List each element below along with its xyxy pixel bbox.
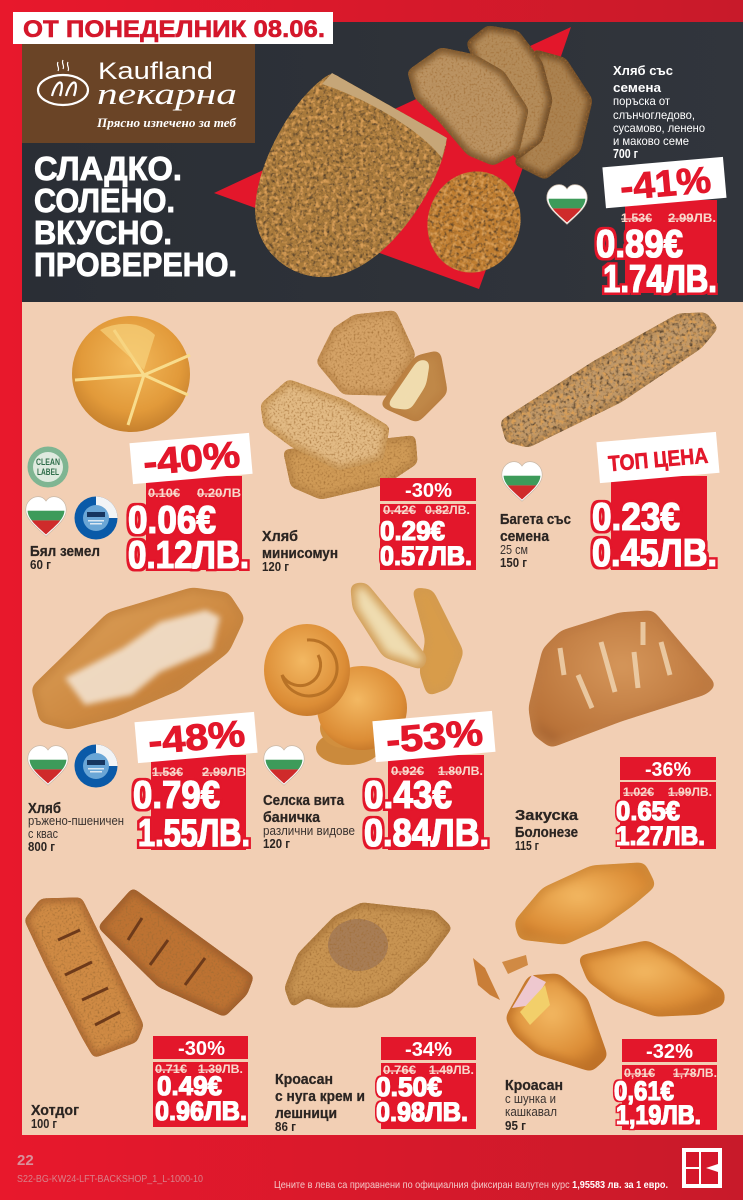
image: minisomun [263,313,445,497]
image: roll [72,316,190,432]
icon: clean label: LABEL [37,467,59,477]
price: 0.71€ [155,1064,188,1076]
hero product text: поръска от [613,94,670,108]
icon: tuv [74,744,118,788]
price: 1.39ЛВ. [198,1064,243,1076]
icon: clean label: CLEAN [36,457,60,467]
page number: 22 [17,1152,34,1169]
price: 0,61€ [614,1076,674,1106]
price: 0.57ЛВ. [380,541,472,571]
product name [500,512,571,570]
price: hero: 0.89€ [596,223,683,266]
icon: heart [26,497,66,536]
price: 0.43€ [364,774,452,817]
price: 0.42€ [383,505,417,517]
product name: Хотдог [31,1103,79,1119]
Kaufland logo [682,1148,722,1188]
print code: S22-BG-KW24-LFT-BACKSHOP_1_L-1000-10 [17,1174,203,1185]
price: -53% [384,712,485,761]
logo panel: пекарна [97,76,237,111]
product name: ръжено-пшеничен [28,814,124,828]
icon: tuv [74,496,118,540]
product name: с шунка и [505,1092,556,1106]
hero product text: 700 г [613,146,638,161]
price: 1,78ЛВ. [673,1068,717,1080]
price: 0.23€ [592,496,680,539]
currency note: Цените в лева са приравнени по официалния фиксиран валутен курс 1,95583 лв. за 1 евро. [274,1179,668,1191]
price: hero: 2.99 ЛВ. [668,213,716,225]
icon: clean label [28,446,68,488]
product: Хотдог [27,891,251,1131]
price [153,1036,248,1127]
price: 1,19ЛВ. [616,1100,701,1130]
product name: 60 г [30,558,51,572]
icon: heart [28,746,68,785]
price: 0.29€ [380,516,445,546]
product name: Хляб [28,801,61,817]
price [380,478,476,571]
image: banichka [264,585,461,765]
product name: 115 г [515,839,539,853]
price: 1.27ЛВ. [616,821,705,851]
price [614,1039,717,1130]
headline: ВКУСНО. [34,215,172,252]
red star shape [214,27,571,289]
product name: семена [500,529,550,545]
product: Багета [500,315,720,575]
image: hotdogs [27,891,251,1055]
icon: heart [264,746,304,785]
product name: Селска вита [263,793,345,809]
logo panel [22,44,255,143]
product name: баничка [263,810,321,826]
price [128,433,253,577]
price: 0.96ЛВ. [155,1096,247,1126]
price [376,1037,476,1129]
product name: Хляб [262,529,298,545]
product name: 95 г [505,1119,526,1133]
product name: Багета със [500,512,571,528]
price: 0.65€ [616,796,680,826]
price: 2.99 ЛВ [202,767,246,779]
panel: hero [13,12,743,302]
product: Кроасан с шунка [473,865,722,1133]
product name [275,1072,365,1134]
panel: products [22,302,743,1135]
price [592,432,720,575]
hero bread loaf [255,73,447,277]
image: croissants [473,865,722,1069]
price: 0.12ЛВ. [128,534,249,577]
headline: СОЛЕНО. [34,183,175,220]
price: 0.20 ЛВ [197,488,241,500]
price: 0.98ЛВ. [376,1097,468,1127]
product name: 120 г [263,837,290,851]
price: -40% [141,434,242,483]
hero product text: и маково семе [613,134,689,148]
price: 1.99ЛВ. [668,787,712,799]
price: hero: 1.53€ [621,213,653,225]
bakery icon [38,60,88,105]
price: 0.10€ [148,488,181,500]
product name: 800 г [28,840,55,854]
product name [28,801,124,854]
headline: ПРОВЕРЕНО. [34,247,237,284]
footer [17,1148,722,1191]
logo panel: Прясно изпечено за теб [96,115,237,130]
price: 0.50€ [376,1072,442,1102]
price: 0.06€ [128,499,216,542]
product name: Болонезе [515,825,578,841]
product name: 25 см [500,543,528,557]
price [616,757,716,851]
price: 1.55ЛВ. [138,812,250,855]
hero product text: Хляб със [613,63,673,78]
product name [263,793,355,851]
product name: кашкавал [505,1105,557,1119]
price: 1.53€ [152,767,184,779]
price: 1.80ЛВ. [438,766,483,778]
price: 1.02€ [623,787,655,799]
date banner: ОТ ПОНЕДЕЛНИК 08.06. [23,16,325,43]
price: -30% [405,480,452,502]
product: Хляб ръжено-пшеничен [28,590,258,855]
price: hero: 1.74ЛВ. [603,258,717,301]
product name: с квас [28,827,58,841]
product name: 150 г [500,556,527,570]
price: hero [596,157,727,301]
image: pastry [531,613,713,745]
product name: минисомун [262,546,338,562]
price: ТОП ЦЕНА [607,443,709,476]
price: 1.49ЛВ. [429,1065,474,1077]
product: Селска вита баничка [263,585,496,855]
hero product text: семена [613,80,662,95]
logo text: Kaufland [98,58,213,85]
product name [30,544,100,572]
product name: 100 г [31,1117,57,1131]
hero product text: слънчогледово, [613,108,695,122]
hero product text: сусамово, ленено [613,121,705,135]
price: -36% [645,759,691,781]
price: 0.84ЛВ. [364,812,489,855]
price: 0.45ЛВ. [592,532,717,575]
product name: Закуска [515,808,579,824]
icon: heart [502,462,542,501]
headline [34,151,237,284]
price: -34% [405,1039,452,1061]
icon: bulgarian heart [547,185,587,224]
price: 0.49€ [157,1071,222,1101]
price: 0.92€ [391,766,425,778]
price: 0,91€ [624,1068,656,1080]
product name [515,808,579,853]
price: 0.79€ [133,774,220,817]
product name: Кроасан [505,1078,563,1094]
price: -32% [646,1041,693,1063]
product: Закуска Болонезе [515,613,716,853]
price: -30% [178,1038,225,1060]
hero product text [613,63,705,161]
product name: лешници [275,1106,337,1122]
price [133,712,258,855]
product: Хляб минисомун [262,313,476,574]
image: nougat croissant [287,905,449,1005]
price: 0.76€ [383,1065,417,1077]
price [364,711,496,855]
product name [31,1103,79,1131]
product name: с нуга крем и [275,1089,365,1105]
headline: СЛАДКО. [34,151,182,188]
product name: Бял земел [30,544,100,560]
image: baguette [503,315,715,445]
price: 0.82ЛВ. [425,505,470,517]
hero bread roll [414,159,534,285]
product name [505,1078,563,1133]
image: rye bread [34,590,242,727]
price: hero: -41% [618,159,713,208]
product name: 86 г [275,1120,296,1134]
product name [262,529,338,574]
product name: Кроасан [275,1072,333,1088]
product name: 120 г [262,560,289,574]
product: Бял земел [26,316,253,577]
price: -48% [146,713,247,762]
product: Кроасан с нуга [275,905,476,1134]
product name: различни видове [263,824,355,838]
hero bread slices [410,28,590,177]
